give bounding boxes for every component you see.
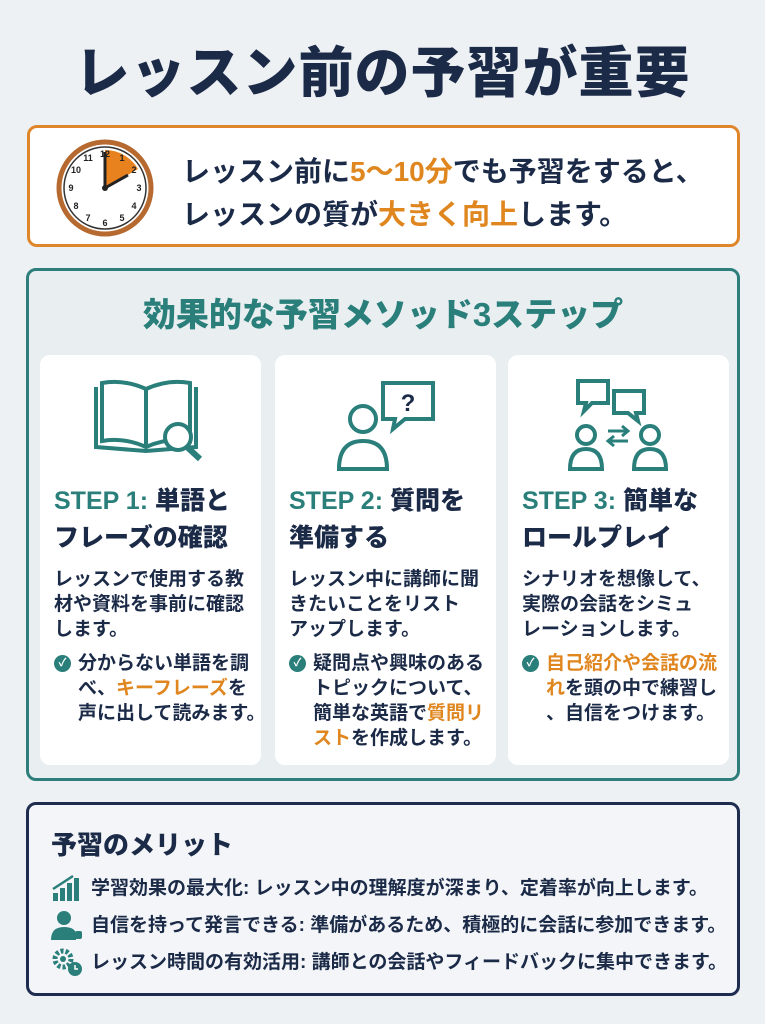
step 1 check item: ✓	[59, 657, 66, 669]
icon: clock: 7	[85, 213, 91, 223]
icon: clock	[56, 140, 154, 236]
icon: book with magnifier	[94, 380, 202, 462]
step 3 check item: れを頭の中で練習し	[546, 678, 717, 699]
icon: person with question	[337, 381, 435, 471]
heading: steps: 効果的な予習メソッド3ステップ	[143, 296, 623, 333]
step 2 check item: 簡単な英語で質問リ	[313, 703, 484, 724]
text: key message: レッスン前に5〜10分でも予習をすると、	[182, 156, 704, 187]
step 3 check item: ✓	[527, 657, 534, 669]
text: key message	[182, 156, 704, 230]
panel: merits: レッスン時間の有効活用: 講師との会話やフィードバックに集中できます。	[91, 952, 727, 973]
step 1 check item: 分からない単語を調	[78, 653, 249, 674]
step 2 heading: 準備する	[289, 524, 389, 552]
step 3 check item	[522, 652, 717, 724]
step 1 check item: 声に出して読みます。	[78, 703, 266, 724]
icon: clock: 3	[136, 183, 142, 193]
panel: 3 steps	[26, 268, 740, 781]
step 3 check item: 、自信をつけます。	[546, 703, 715, 724]
step 1 heading	[54, 487, 230, 552]
heading: merits: 予習のメリット	[51, 830, 233, 860]
step 2 check item	[289, 652, 484, 749]
icon: clock: 1	[119, 153, 125, 163]
icon: person thumbs up	[51, 911, 82, 940]
panel: merits: 学習効果の最大化: レッスン中の理解度が深まり、定着率が向上します。	[91, 878, 708, 899]
icon: clock: 5	[119, 213, 125, 223]
step 2 body: きたいことをリスト	[289, 594, 460, 615]
panel: merits: 自信を持って発言できる: 準備があるため、積極的に会話に参加できます。	[91, 915, 726, 936]
step 2 heading: STEP 2: 質問を	[289, 487, 465, 515]
merit 3	[52, 948, 727, 976]
step 2 check item: トピックについて、	[313, 678, 482, 699]
step 3 check item: 自己紹介や会話の流	[546, 653, 717, 674]
step 1 heading: フレーズの確認	[54, 524, 228, 552]
step 3 body	[522, 568, 710, 640]
icon: clock: 12	[100, 149, 110, 159]
step 3 body: 実際の会話をシミュ	[522, 594, 693, 615]
step 3 body: シナリオを想像して、	[522, 569, 710, 590]
icon: clock: 11	[83, 153, 93, 163]
step 1 heading: STEP 1: 単語と	[54, 487, 230, 515]
icon: clock: 8	[73, 201, 79, 211]
step 1 body: レッスンで使用する教	[54, 569, 244, 590]
step 3 body: レーションします。	[522, 619, 691, 640]
step 3 heading: STEP 3: 簡単な	[522, 487, 698, 515]
step 3 heading: ロールプレイ	[522, 524, 672, 552]
icon: clock: 9	[68, 183, 74, 193]
step 2 heading	[289, 487, 465, 552]
icon: gear with clock	[52, 948, 82, 976]
icon: clock: 6	[102, 218, 108, 228]
icon: clock: 4	[131, 201, 137, 211]
step 2 check item: ✓	[294, 657, 301, 669]
card: step 2	[275, 355, 496, 765]
panel: merits	[26, 802, 740, 996]
step 1 body: 材や資料を事前に確認	[54, 594, 244, 615]
step 2 body	[289, 568, 479, 640]
merit 1	[52, 875, 708, 901]
card: step 1	[40, 355, 261, 765]
callout: orange key message	[27, 125, 740, 247]
step 1 body: します。	[54, 619, 128, 640]
step 1 body	[54, 568, 244, 640]
step 2 body: レッスン中に講師に聞	[289, 569, 479, 590]
merit 2	[51, 911, 726, 940]
step 2 check item: 疑問点や興味のある	[313, 653, 484, 674]
icon: person with question: ?	[401, 390, 415, 417]
step 2 body: アップします。	[289, 619, 420, 640]
step 1 check item	[54, 652, 266, 724]
step 1 check item: べ、キーフレーズを	[78, 678, 247, 699]
step 3 heading	[522, 487, 698, 552]
icon: role play people	[568, 379, 668, 471]
icon: clock: 10	[71, 165, 81, 175]
card: step 3	[508, 355, 729, 765]
icon: clock: 2	[131, 165, 137, 175]
step 2 check item: ストを作成します。	[313, 728, 482, 749]
icon: growth chart	[52, 875, 79, 901]
text: key message: レッスンの質が大きく向上します。	[182, 199, 627, 230]
title: レッスン前の予習が重要	[74, 42, 690, 104]
